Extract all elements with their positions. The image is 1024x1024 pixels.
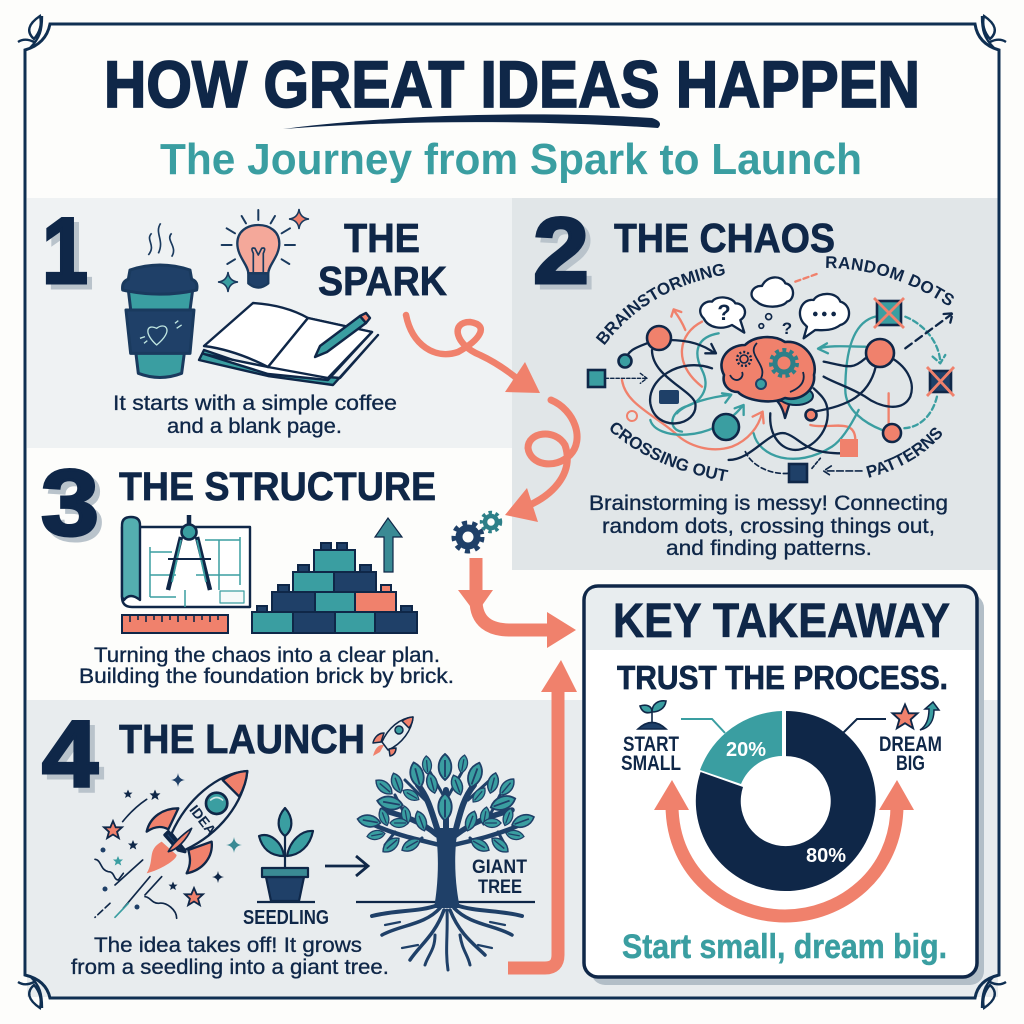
curved labels: RANDOM DOTS: [826, 256, 954, 306]
number 2: 2: [538, 203, 594, 308]
network nodes: [588, 298, 954, 482]
text block: chaos description: [589, 491, 948, 560]
label: seedling: SEEDLING: [243, 907, 329, 929]
number 1: 1: [47, 203, 93, 308]
icons: stars around rocket: [100, 773, 242, 910]
illustration: big rocket labelled idea: [95, 771, 247, 918]
panel: step 2 the chaos: [533, 198, 955, 560]
number 1: 1: [42, 198, 88, 303]
label: giant tree: TREE: [478, 876, 522, 898]
arrow: structure to key takeaway: [458, 558, 576, 648]
panel: step 1 the spark: [42, 198, 447, 438]
heading: the spark: SPARK: [318, 258, 447, 304]
arrow: launch to key takeaway: [508, 660, 577, 968]
number 2: 2: [533, 198, 589, 303]
text block: structure description: Turning the chaos into a clear plan.: [94, 644, 440, 667]
panel: key takeaway: [584, 586, 984, 985]
label: giant tree: GIANT: [472, 856, 527, 878]
icon: coffee cup: [123, 223, 197, 377]
number 4: 4: [47, 706, 103, 811]
chart: tangled network of ideas: [605, 273, 953, 476]
question marks: [717, 300, 792, 338]
heading: the structure: THE STRUCTURE: [119, 465, 436, 509]
chart: donut 20 percent and 80 percent: 80%: [806, 845, 846, 867]
icon: star and rising arrow: [892, 702, 939, 730]
panel: step 4 the launch: [42, 701, 536, 979]
heading: the spark: THE: [344, 215, 420, 261]
text block: structure description: [79, 644, 454, 688]
illustration: giant tree: [356, 754, 536, 970]
card body: [584, 586, 977, 977]
panel: the chaos background: [512, 198, 998, 570]
panel: the spark background: [27, 198, 512, 448]
label: dream big: DREAM: [879, 733, 942, 756]
text block: chaos description: random dots, crossing things out,: [602, 514, 935, 538]
question marks: ?: [717, 300, 731, 325]
title underline swoosh: [283, 114, 660, 129]
icon: small rocket: [373, 717, 413, 756]
text block: launch description: from a seedling into a giant tree.: [71, 955, 389, 979]
subtitle: The Journey from Spark to Launch: [160, 135, 862, 184]
icon: light bulb: [222, 210, 295, 287]
icon: brain with gears: [721, 337, 815, 418]
icon: open notebook with pencil: [199, 303, 378, 385]
icon: thought bubbles: [700, 277, 849, 338]
label: start small: [621, 733, 681, 775]
icon: brick pyramid: [252, 543, 417, 633]
chart: donut 20 percent and 80 percent: 20%: [726, 739, 766, 761]
text block: spark description: [113, 392, 397, 438]
arrow: chaos to structure: [505, 400, 577, 522]
heading: the chaos: THE CHAOS: [614, 215, 835, 261]
panel: step 3 the structure: [41, 450, 454, 688]
label: idea on rocket: IDEA: [186, 802, 220, 838]
heading: key takeaway: KEY TAKEAWAY: [613, 595, 950, 648]
curved labels: [596, 256, 954, 481]
closing statement: Start small, dream big.: [622, 928, 947, 966]
label: dream big: [879, 733, 942, 775]
label: dream big: BIG: [896, 752, 925, 775]
curved labels: BRAINSTORMING: [596, 264, 725, 345]
number 3: 3: [46, 455, 104, 560]
heading: the spark: [318, 215, 447, 304]
title: HOW GREAT IDEAS HAPPEN: [104, 47, 920, 121]
text block: launch description: The idea takes off! It grows: [94, 933, 362, 957]
label: start small: SMALL: [621, 752, 681, 775]
subheading: trust the process: TRUST THE PROCESS.: [617, 659, 948, 696]
question marks: ?: [782, 319, 792, 338]
label: giant tree: [472, 856, 527, 898]
curved labels: CROSSING OUT: [610, 422, 728, 481]
text block: spark description: It starts with a simple coffee: [113, 392, 397, 415]
number 3: 3: [41, 450, 99, 555]
arrow: start small to dream big curve: [654, 780, 914, 916]
card shadow: [591, 594, 984, 985]
card header band: [586, 588, 975, 650]
icon: sparkles: [218, 209, 309, 292]
curved labels: PATTERNS: [866, 428, 942, 478]
icon: blueprint with compass: [122, 515, 250, 607]
text block: launch description: [71, 933, 389, 979]
arrow: seedling to tree: [325, 856, 368, 876]
arrow: growth upward: [375, 518, 402, 572]
label: start small: START: [623, 733, 679, 756]
leader lines: [681, 719, 886, 733]
icon: sprout: [638, 701, 666, 729]
icon: ruler: [122, 615, 228, 633]
panel: the launch background: [27, 700, 998, 997]
text block: chaos description: and finding patterns.: [666, 536, 872, 560]
number 4: 4: [42, 701, 98, 806]
icon: gears: [454, 512, 500, 551]
chart: donut 20 percent and 80 percent: [696, 711, 876, 891]
arrow: spark to chaos: [406, 315, 540, 393]
text block: chaos description: Brainstorming is messy! Connecting: [589, 491, 948, 515]
text block: structure description: Building the foundation brick by brick.: [79, 665, 454, 688]
heading: the launch: THE LAUNCH: [119, 716, 365, 762]
text block: spark description: and a blank page.: [167, 415, 342, 438]
icon: potted seedling: [257, 808, 315, 902]
